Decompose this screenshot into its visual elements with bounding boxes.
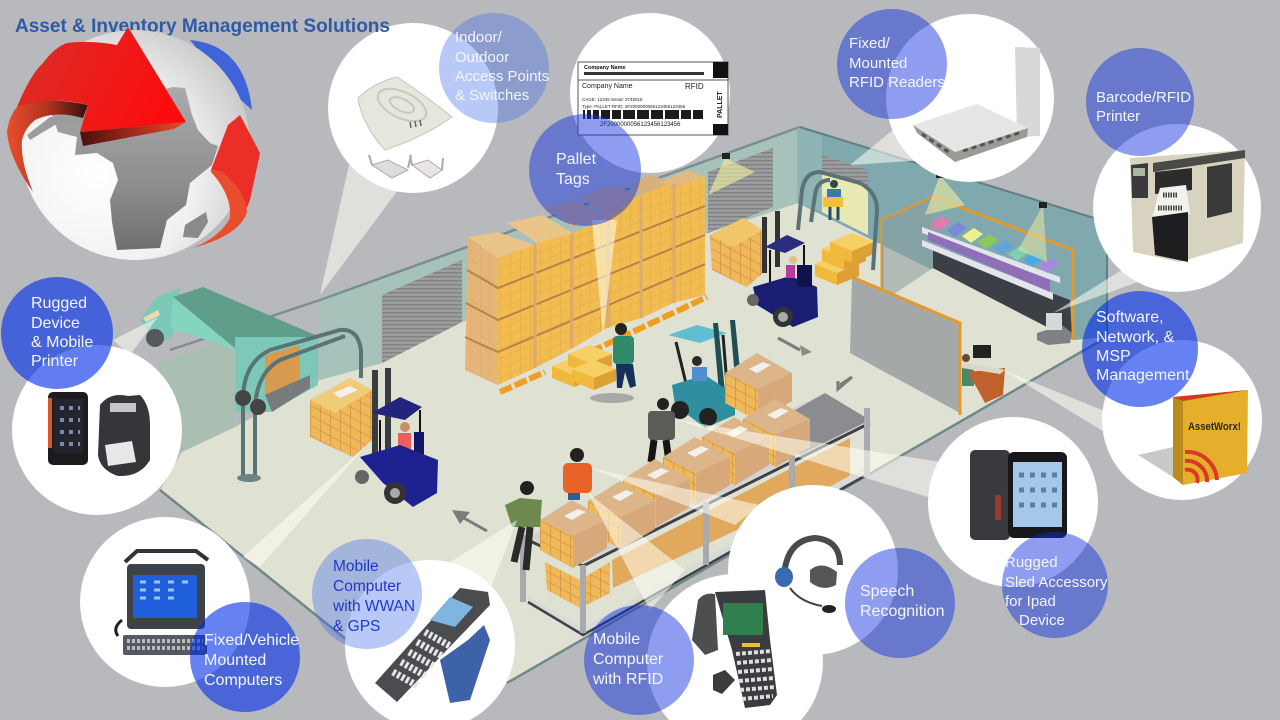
panel: mobile RFID device bbox=[647, 574, 823, 720]
ceiling light bbox=[708, 153, 755, 195]
icon: RFID reader bbox=[913, 47, 1040, 162]
red arrow main bbox=[17, 27, 186, 132]
callout: speech recognition bbox=[845, 548, 955, 658]
icon: barcode printer bbox=[1130, 150, 1245, 262]
left end wall bbox=[157, 337, 235, 452]
callout: rugged device and mobile printer: Printer bbox=[31, 353, 79, 370]
worker in green shirt bbox=[590, 323, 636, 403]
callout: rugged device and mobile printer: Rugged bbox=[31, 295, 87, 312]
panel: sled device bbox=[928, 417, 1098, 587]
panel: mobile computer device bbox=[345, 560, 515, 720]
back-right wall bbox=[798, 127, 1107, 340]
icon: mobile RFID computer bbox=[692, 590, 777, 708]
box on forks bbox=[725, 353, 792, 421]
callout: indoor outdoor access points: Indoor/ bbox=[455, 29, 503, 46]
callout: speech recognition: Speech bbox=[860, 583, 914, 600]
icon: rugged handheld and mobile printer bbox=[48, 392, 150, 476]
globe sphere bbox=[20, 30, 250, 260]
callout: mobile computer with RFID: Computer bbox=[593, 651, 664, 668]
warehouse scene bbox=[140, 127, 1107, 720]
back forklift with pallet bbox=[710, 211, 818, 327]
front forklift with pallet bbox=[310, 368, 438, 507]
callout: software network MSP management: Management bbox=[1096, 367, 1190, 384]
callout: mobile computer with WWAN and GPS: Computer bbox=[333, 578, 401, 595]
roller doors bbox=[382, 148, 868, 363]
callout: speech recognition: Recognition bbox=[860, 603, 944, 620]
icon: software box bbox=[1138, 390, 1248, 485]
icon: pallet label: PALLET bbox=[717, 91, 724, 118]
icon: pallet label: Company Name bbox=[582, 83, 633, 90]
callout: pallet tags: Pallet bbox=[556, 151, 597, 168]
grey partition bbox=[850, 277, 960, 415]
callout: rugged device and mobile printer bbox=[1, 277, 113, 389]
callout: fixed mounted RFID readers bbox=[837, 9, 947, 119]
callout: rugged device and mobile printer: Device bbox=[31, 315, 80, 332]
callout: rugged sled accessory: Rugged bbox=[1005, 554, 1058, 571]
callout: barcode RFID printer: Printer bbox=[1096, 108, 1140, 125]
callout: mobile computer with WWAN and GPS: Mobile bbox=[333, 558, 379, 575]
office worker at desk bbox=[962, 345, 1005, 403]
icon: pallet label: RFID bbox=[685, 82, 704, 91]
boxes on table bbox=[540, 399, 810, 568]
panel: printer device bbox=[1093, 124, 1261, 292]
icon: software box: AssetWorx! bbox=[1188, 421, 1241, 433]
door arch bbox=[798, 172, 877, 270]
delivery truck bbox=[140, 287, 320, 412]
callout: pallet tags bbox=[529, 114, 641, 226]
panel: speech device bbox=[728, 485, 898, 655]
callout: mobile computer with RFID bbox=[584, 605, 694, 715]
callout: fixed vehicle mounted computers bbox=[190, 602, 300, 712]
callout: mobile computer with WWAN and GPS: & GPS bbox=[333, 618, 380, 635]
callout: fixed mounted RFID readers: Fixed/ bbox=[849, 35, 891, 52]
callout: rugged device and mobile printer: & Mobile bbox=[31, 334, 93, 351]
icon: headset bbox=[775, 538, 840, 613]
callout: rugged sled accessory: Device bbox=[1019, 612, 1065, 629]
callout: fixed vehicle mounted computers: Mounted bbox=[204, 652, 266, 669]
pallet stack wall bbox=[465, 170, 707, 392]
icon: pallet label: 2F2000000056123456123456 bbox=[600, 122, 681, 128]
worker in orange shirt bbox=[563, 448, 592, 500]
red arrow edge bbox=[80, 122, 186, 146]
callout: mobile computer with RFID: with RFID bbox=[592, 671, 663, 688]
callout: fixed vehicle mounted computers: Fixed/Vehicle bbox=[204, 632, 299, 649]
back-left wall bbox=[320, 127, 800, 380]
icon: rugged tablet sled bbox=[970, 450, 1067, 540]
light beams bbox=[113, 120, 1143, 610]
icon: globe with red arrows bbox=[7, 27, 260, 260]
callout: software network MSP management: Network, & bbox=[1096, 329, 1175, 346]
icon: pallet label bbox=[578, 62, 728, 135]
arrow shadow band bbox=[27, 115, 85, 140]
callout: barcode RFID printer bbox=[1086, 48, 1194, 156]
callout: software network MSP management: Software, bbox=[1096, 309, 1164, 326]
callout: rugged sled accessory bbox=[1002, 532, 1108, 638]
dock gate arch bbox=[235, 330, 361, 482]
icon: vehicle mounted computer bbox=[116, 551, 208, 655]
callout: indoor outdoor access points: Outdoor bbox=[455, 49, 509, 66]
worker in green with scanner bbox=[505, 481, 542, 570]
callout: indoor outdoor access points: & Switches bbox=[455, 87, 529, 104]
madagascar bbox=[183, 212, 208, 238]
teal forklift bbox=[668, 320, 742, 428]
callout: mobile computer with WWAN and GPS bbox=[312, 539, 422, 649]
callout: fixed mounted RFID readers: Mounted bbox=[849, 55, 907, 72]
panel: access points device bbox=[328, 23, 498, 193]
callout: rugged sled accessory: for Ipad bbox=[1005, 593, 1056, 610]
red arrow inner band bbox=[7, 100, 88, 192]
panel: RFID reader device bbox=[886, 14, 1054, 182]
panel: software device bbox=[1102, 340, 1262, 500]
icon: wireless access point bbox=[358, 77, 452, 178]
icon: pallet label: CAGE: 12345 Serial: 3745018 bbox=[582, 97, 643, 102]
callout: mobile computer with WWAN and GPS: with WWAN bbox=[332, 598, 415, 615]
callout: pallet tags: Tags bbox=[556, 171, 590, 188]
small box pile bbox=[552, 345, 616, 390]
right red arrow band bbox=[193, 170, 247, 248]
right red arrow top bbox=[211, 115, 260, 210]
printer station bbox=[1037, 313, 1072, 345]
callout: software network MSP management bbox=[1082, 291, 1198, 407]
africa landmass bbox=[52, 87, 218, 250]
icon: pallet label: Company Name bbox=[584, 65, 626, 71]
icon: pallet label: Type: PALLET RFID: 3F2000000056123456123456 bbox=[582, 104, 686, 109]
panel: pallet tag device bbox=[570, 13, 730, 173]
callout: barcode RFID printer: Barcode/RFID bbox=[1096, 89, 1191, 106]
callout: indoor outdoor access points: Access Points bbox=[455, 68, 549, 85]
floor bbox=[160, 203, 1107, 720]
small boxes near door bbox=[815, 233, 874, 285]
blue crescent bbox=[190, 40, 252, 110]
panel: vehicle computer device bbox=[80, 517, 250, 687]
floor arrows bbox=[452, 338, 852, 531]
callout: mobile computer with RFID: Mobile bbox=[593, 631, 640, 648]
shelf display room bbox=[882, 172, 1073, 350]
callout: rugged sled accessory: Sled Accessory bbox=[1005, 574, 1108, 591]
conveyor table bbox=[523, 393, 870, 637]
callout: fixed vehicle mounted computers: Computers bbox=[204, 672, 282, 689]
icon: handheld scanner bbox=[375, 588, 490, 703]
callout: fixed mounted RFID readers: RFID Readers bbox=[849, 74, 945, 91]
callout: software network MSP management: MSP bbox=[1096, 348, 1131, 365]
title: Asset & Inventory Management Solutions bbox=[15, 16, 390, 37]
callout: indoor outdoor access points bbox=[439, 13, 549, 123]
worker at door bbox=[823, 180, 843, 220]
panel: rugged device bbox=[12, 345, 182, 515]
worker at table bbox=[648, 398, 675, 462]
